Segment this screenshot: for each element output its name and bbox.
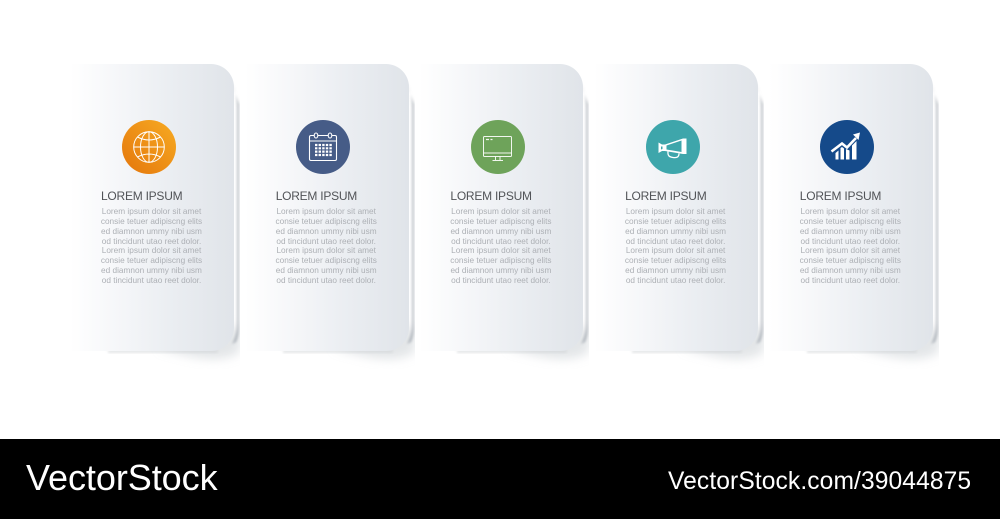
text block: od tincidunt utao reet dolor. <box>451 276 551 285</box>
text block: Lorem ipsum dolor sit amet <box>451 207 551 216</box>
text block: ed diamnon ummy nibi usm <box>276 227 377 236</box>
text block: ed diamnon ummy nibi usm <box>625 266 726 275</box>
icon: megaphone <box>646 120 700 174</box>
text block: ed diamnon ummy nibi usm <box>450 227 551 236</box>
panel: step 3 monitor <box>450 64 589 362</box>
text block <box>450 207 552 285</box>
text block: Lorem ipsum dolor sit amet <box>801 207 900 216</box>
text block: consie tetuer adipiscng elits <box>800 256 901 265</box>
icon: globe <box>122 120 176 174</box>
text block: consie tetuer adipiscng elits <box>450 256 552 265</box>
heading: LOREM IPSUM <box>101 189 182 203</box>
heading: LOREM IPSUM <box>276 189 357 203</box>
text block <box>625 207 726 285</box>
text block: Lorem ipsum dolor sit amet <box>801 246 900 255</box>
text block: consie tetuer adipiscng elits <box>625 217 726 226</box>
heading: LOREM IPSUM <box>800 189 881 203</box>
text block: od tincidunt utao reet dolor. <box>102 237 201 246</box>
text block: consie tetuer adipiscng elits <box>450 217 552 226</box>
icon: calendar <box>296 120 350 174</box>
panel: step 1 globe <box>101 64 240 362</box>
text block: od tincidunt utao reet dolor. <box>276 276 376 285</box>
text block: Lorem ipsum dolor sit amet <box>451 246 551 255</box>
text block: ed diamnon ummy nibi usm <box>276 266 377 275</box>
text block: ed diamnon ummy nibi usm <box>625 227 726 236</box>
panel: step 4 megaphone <box>625 64 764 362</box>
text block: consie tetuer adipiscng elits <box>625 256 726 265</box>
text block <box>800 207 901 285</box>
text block: Lorem ipsum dolor sit amet <box>626 246 725 255</box>
text block: ed diamnon ummy nibi usm <box>450 266 551 275</box>
text block: consie tetuer adipiscng elits <box>800 217 901 226</box>
text block: od tincidunt utao reet dolor. <box>801 276 900 285</box>
text block: od tincidunt utao reet dolor. <box>276 237 376 246</box>
heading: LOREM IPSUM <box>625 189 706 203</box>
text block: od tincidunt utao reet dolor. <box>801 237 900 246</box>
text block <box>276 207 377 285</box>
panel: step 5 growth chart <box>800 64 939 362</box>
text block: consie tetuer adipiscng elits <box>276 256 377 265</box>
text block: od tincidunt utao reet dolor. <box>102 276 201 285</box>
text block: Lorem ipsum dolor sit amet <box>102 246 201 255</box>
text block: Lorem ipsum dolor sit amet <box>276 207 376 216</box>
heading: LOREM IPSUM <box>450 189 532 203</box>
text block: ed diamnon ummy nibi usm <box>101 227 202 236</box>
text block: Lorem ipsum dolor sit amet <box>276 246 376 255</box>
panel: step 2 calendar <box>276 64 415 362</box>
text block: consie tetuer adipiscng elits <box>101 256 202 265</box>
text block: od tincidunt utao reet dolor. <box>626 276 725 285</box>
footer banner <box>0 439 1000 519</box>
text block: consie tetuer adipiscng elits <box>276 217 377 226</box>
text block: ed diamnon ummy nibi usm <box>800 266 901 275</box>
text block: od tincidunt utao reet dolor. <box>451 237 551 246</box>
text block: Lorem ipsum dolor sit amet <box>626 207 725 216</box>
brand name: VectorStock <box>26 457 218 498</box>
text block: ed diamnon ummy nibi usm <box>800 227 901 236</box>
icon: monitor <box>471 120 525 174</box>
text block: od tincidunt utao reet dolor. <box>626 237 725 246</box>
text block <box>101 207 202 285</box>
image url: VectorStock.com/39044875 <box>668 468 971 495</box>
icon: growth chart <box>820 120 874 174</box>
text block: ed diamnon ummy nibi usm <box>101 266 202 275</box>
text block: Lorem ipsum dolor sit amet <box>102 207 201 216</box>
text block: consie tetuer adipiscng elits <box>101 217 202 226</box>
